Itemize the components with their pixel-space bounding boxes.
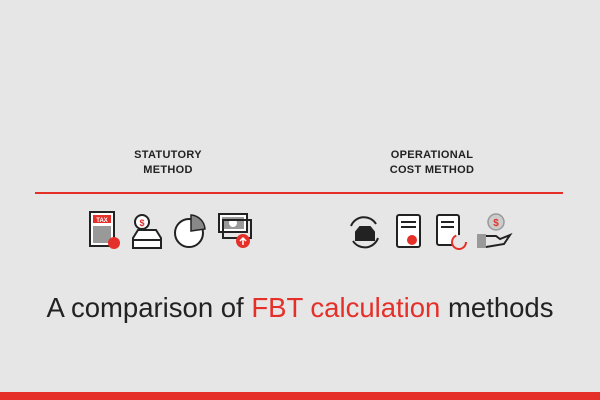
- heading: operational cost method: [390, 149, 474, 176]
- icon: tax calculator: [90, 212, 120, 249]
- red divider line: [35, 192, 563, 194]
- icon: document with percent: [397, 215, 420, 247]
- heading: operational cost method: OPERATIONAL: [391, 149, 473, 161]
- icon: car with dollar: [133, 215, 161, 248]
- icon: hand with coin: $: [493, 218, 499, 229]
- icon: rotating car: [351, 217, 378, 247]
- icon: money with up arrow: [219, 214, 251, 248]
- heading: statutory method: METHOD: [143, 164, 193, 176]
- icon: tax calculator: TAX: [96, 218, 108, 224]
- title: A comparison of FBT calculation methods: [46, 292, 553, 323]
- heading: operational cost method: COST METHOD: [390, 164, 474, 176]
- heading: statutory method: [134, 149, 202, 176]
- icon: car with dollar: $: [139, 218, 145, 228]
- heading: statutory method: STATUTORY: [134, 149, 202, 161]
- bottom red bar: [0, 392, 600, 400]
- icon: pie chart: [175, 215, 205, 247]
- icon: document with cycle: [437, 215, 466, 249]
- icon: hand with coin: [477, 214, 510, 248]
